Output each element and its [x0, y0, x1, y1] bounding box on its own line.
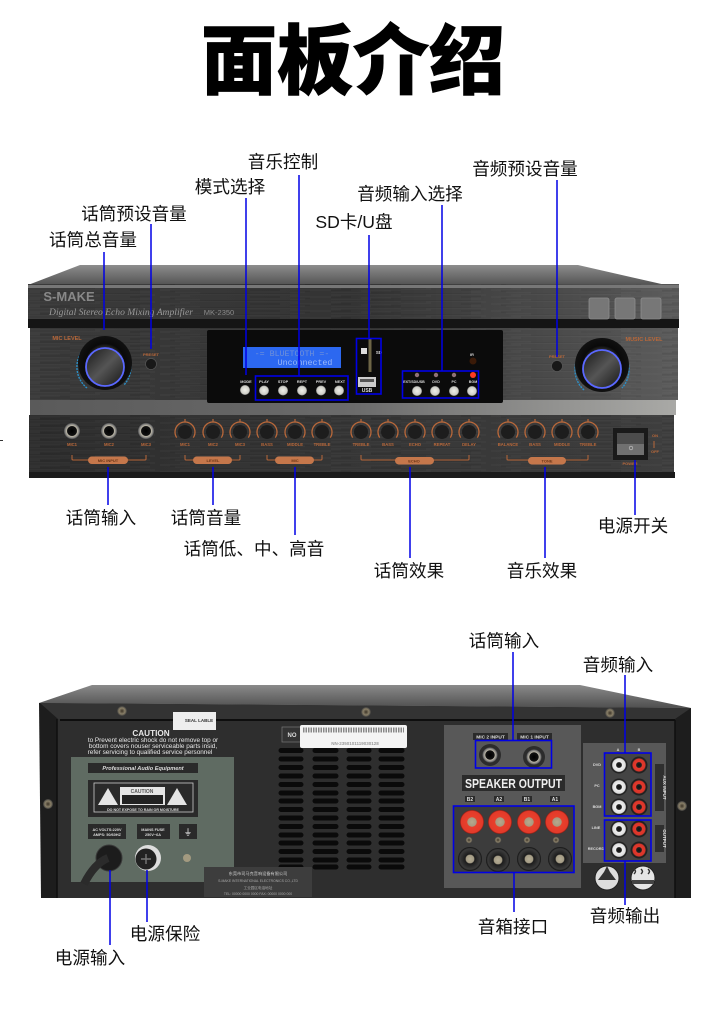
audio input select buttons: PC	[452, 380, 457, 384]
mode button: MODE	[240, 380, 252, 384]
channel letters	[465, 796, 560, 803]
chinese address label: 工业园区电话地址	[244, 885, 273, 890]
labels: front panel: 话筒低、中、高音	[184, 539, 324, 559]
caution text: to Prevent electric shock do not remove top or	[88, 737, 219, 744]
labels: front panel: 话筒输入	[66, 508, 136, 528]
labels: rear panel: 话筒输入	[469, 631, 539, 651]
power cable	[84, 845, 122, 884]
mode button	[240, 380, 252, 395]
caution text: refer servicing to qualified service personnel	[88, 749, 212, 756]
labels: front panel: 模式选择	[195, 177, 266, 197]
stray tick	[0, 440, 3, 441]
labels: front panel: 话筒总音量	[49, 230, 137, 250]
mic input jacks: MIC3	[141, 442, 152, 447]
seal label: SEAL LABLE	[185, 718, 213, 723]
caution box: DO NOT EXPOSE TO RAIN OR MOISTURE	[107, 808, 180, 812]
front upper fascia	[28, 284, 679, 478]
logos	[595, 866, 655, 890]
vents	[281, 750, 402, 867]
mic input jacks	[64, 422, 154, 447]
volts fuse ground tags: AMPS: 50/60HZ	[93, 833, 122, 837]
labels: front panel: 话筒效果	[374, 561, 444, 581]
rotary knobs row: TREBLE	[314, 442, 331, 447]
brand logo	[43, 289, 234, 318]
seal label	[173, 712, 216, 730]
rca output	[604, 820, 651, 861]
rotary knobs row: MIC1	[180, 442, 191, 447]
labels: front panel: 话筒预设音量	[81, 204, 187, 224]
labels: rear panel: 电源保险	[130, 924, 201, 944]
labels: rear panel	[55, 631, 660, 968]
power switch: ON	[652, 433, 658, 438]
brand logo: MK-2350	[204, 308, 234, 317]
row labels: PC	[594, 784, 600, 788]
group pills: LEVEL	[207, 458, 220, 463]
caution box	[88, 780, 198, 817]
rotary knobs row: BASS	[382, 442, 394, 447]
lcd screen: -= BLUETOOTH =-	[255, 350, 329, 359]
rotary knobs row: BALANCE	[498, 442, 518, 447]
preset knob left: PRESET	[143, 352, 160, 357]
vertical tags	[655, 764, 667, 852]
sd and usb slots: USB	[362, 388, 373, 394]
channel letters: A2	[496, 797, 502, 803]
chinese address label	[204, 867, 312, 897]
row labels: A	[617, 748, 620, 752]
lcd screen	[243, 347, 341, 368]
chassis top	[28, 265, 679, 288]
music control buttons: STOP	[278, 380, 289, 384]
rotary knobs row: MIC2	[208, 442, 219, 447]
preset knob left	[143, 352, 160, 370]
row labels: B	[638, 748, 641, 752]
music control buttons: PREV	[316, 380, 327, 384]
labels: front panel: SD卡/U盘	[315, 212, 393, 232]
chinese address label: S-MAKE INTERNATIONAL ELECTRONICS CO.,LTD	[218, 879, 298, 883]
sd and usb slots: SD	[376, 350, 383, 355]
professional audio equipment	[88, 763, 198, 773]
display panel	[207, 330, 503, 403]
labels: front panel: 音频预设音量	[472, 159, 578, 179]
labels: rear panel: 音箱接口	[478, 917, 548, 937]
labels: front panel: 话筒音量	[171, 508, 241, 528]
music control buttons: NEXT	[335, 380, 346, 384]
mic input jacks: MIC2	[104, 442, 115, 447]
speaker terminals	[454, 806, 574, 872]
caution text: bottom covers nouser serviceable parts insid,	[89, 743, 217, 750]
ground stud	[183, 854, 191, 862]
rotary knobs row: MIDDLE	[554, 442, 570, 447]
knob: mic level	[52, 336, 132, 390]
power switch: POWER	[622, 461, 638, 466]
caution text: CAUTION	[132, 729, 170, 738]
sd and usb slots	[356, 338, 383, 394]
rotary knobs row: MIC3	[235, 442, 246, 447]
music control buttons: PLAY	[259, 380, 269, 384]
warning label panel	[71, 757, 234, 884]
brand logo: Digital Stereo Echo Mixing Amplifier	[48, 307, 193, 318]
group pills: ECHO	[408, 458, 420, 464]
aux input output panel	[583, 743, 667, 863]
rear body	[39, 703, 691, 898]
knob: music level	[575, 337, 663, 392]
barcode sticker: NN-2350101119030128	[331, 741, 379, 746]
barcode sticker: NO	[288, 733, 297, 739]
labels: front panel: 音乐控制	[248, 152, 318, 172]
audio input select buttons: BGM	[469, 380, 477, 384]
group pills: MIC INPUT	[98, 458, 119, 463]
screws	[43, 706, 687, 811]
rear panel amplifier	[39, 685, 691, 898]
fuse holder	[135, 845, 161, 871]
speaker output heading: SPEAKER OUTPUT	[465, 777, 562, 791]
rotary knobs row	[175, 419, 598, 447]
row labels: BGM	[593, 805, 601, 809]
audio input select buttons: DVD	[432, 380, 440, 384]
rotary knobs row: DELAY	[462, 442, 476, 447]
rotary knobs row: BASS	[261, 442, 273, 447]
brand logo: S-MAKE	[43, 289, 95, 304]
volts fuse ground tags	[88, 824, 197, 839]
rotary knobs row: TREBLE	[580, 442, 597, 447]
row labels: RECORD	[588, 847, 604, 851]
channel letters: B1	[524, 797, 530, 803]
group pills	[88, 456, 566, 464]
volts fuse ground tags: 250V~6A	[145, 833, 161, 837]
preset knob right: PRESET	[549, 354, 566, 359]
vertical tags: AUX INPUT	[662, 775, 667, 800]
chinese address label: TEL: 00000 0000 0000 FAX: 00000 0000 000	[224, 892, 292, 896]
leader lines: front panel	[104, 175, 635, 558]
caution box: CAUTION	[131, 789, 154, 795]
front panel amplifier	[28, 265, 679, 478]
group brackets	[72, 455, 588, 460]
power switch	[613, 428, 660, 466]
power switch: OFF	[651, 449, 660, 454]
labels: front panel	[49, 152, 668, 581]
music control buttons: REPT	[297, 380, 308, 384]
row labels	[588, 748, 641, 851]
knob: mic level: MIC LEVEL	[52, 336, 82, 342]
row labels: DVD	[593, 763, 601, 767]
preset knob right	[549, 354, 566, 372]
caution text	[88, 729, 219, 756]
audio input select buttons: EXT/SD/USB	[403, 380, 425, 384]
mic inputs	[473, 733, 552, 768]
group pills: MIC	[291, 458, 299, 463]
rotary knobs row: BASS	[529, 442, 541, 447]
rca aux input	[604, 753, 651, 816]
volts fuse ground tags: AC VOLTS:220V	[92, 828, 122, 832]
mic inputs: MIC 1 INPUT	[520, 734, 549, 740]
labels: rear panel: 音频输入	[583, 655, 653, 675]
professional audio equipment: Professional Audio Equipment	[102, 766, 185, 772]
rotary knobs row: ECHO	[409, 442, 422, 447]
labels: front panel: 电源开关	[598, 516, 668, 536]
mic input jacks: MIC1	[67, 442, 78, 447]
knob: music level: MUSIC LEVEL	[626, 337, 663, 343]
labels: front panel: 音乐效果	[507, 561, 577, 581]
leader lines: rear panel	[110, 652, 625, 945]
barcode sticker	[282, 725, 407, 748]
rear chassis top	[39, 685, 691, 708]
volts fuse ground tags: MAINS FUSE	[141, 828, 165, 832]
music control buttons	[256, 376, 348, 400]
lcd screen: Unconnected	[278, 358, 332, 368]
rotary knobs row: REPEAT	[434, 442, 451, 447]
mic inputs: MIC 2 INPUT	[476, 734, 505, 740]
vertical tags: OUTPUT	[662, 829, 667, 848]
icons: bluetooth usb sd	[589, 298, 661, 319]
title: 面板介绍	[201, 20, 505, 105]
rotary knobs row: MIDDLE	[287, 442, 303, 447]
speaker output panel	[444, 725, 581, 888]
row labels: LINE	[592, 826, 601, 830]
audio input select buttons	[402, 353, 478, 398]
labels: front panel: 音频输入选择	[357, 184, 463, 204]
audio input select buttons: IR	[470, 353, 474, 357]
labels: rear panel: 音频输出	[590, 906, 660, 926]
group pills: TONE	[541, 458, 553, 464]
channel letters: A1	[552, 797, 558, 803]
labels: rear panel: 电源输入	[55, 948, 125, 968]
channel letters: B2	[467, 797, 473, 803]
chinese address label: 东莞市司马克音响设备有限公司	[229, 870, 287, 877]
rotary knobs row: TREBLE	[353, 442, 370, 447]
volts fuse ground tags: ⏚	[184, 828, 192, 837]
